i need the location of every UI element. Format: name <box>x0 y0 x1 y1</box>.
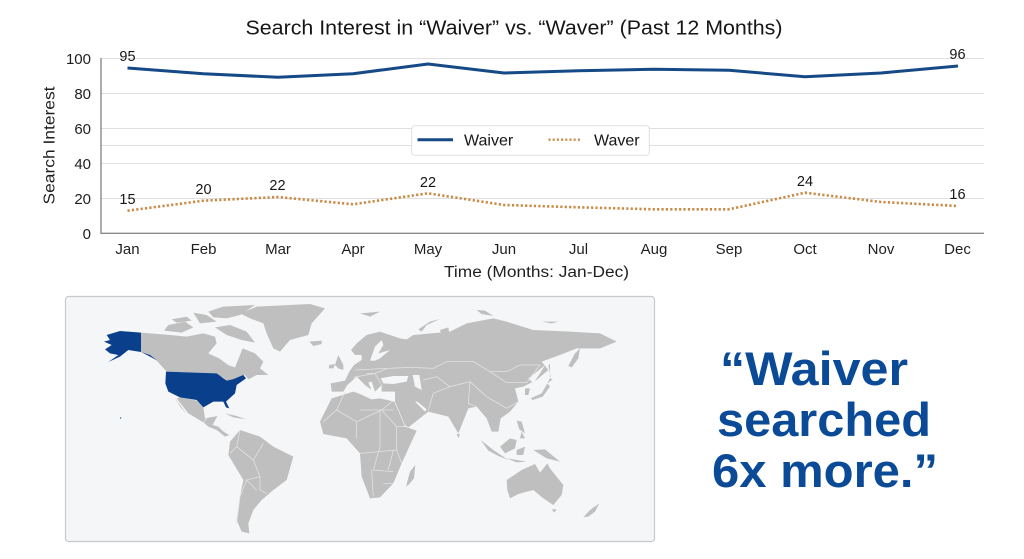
callout quote <box>712 342 938 497</box>
map: country borders <box>203 362 540 523</box>
y axis labels: 0 <box>83 226 91 243</box>
data labels <box>119 47 966 208</box>
data labels: 15 <box>119 192 136 208</box>
Waiver line <box>128 64 958 77</box>
data labels: 16 <box>949 187 966 203</box>
x axis labels: Jan <box>115 241 140 258</box>
y axis labels: 20 <box>74 191 91 208</box>
x axis labels: Mar <box>265 241 291 258</box>
data labels: 22 <box>420 175 436 191</box>
legend <box>412 126 649 155</box>
legend: Waver <box>594 132 640 149</box>
map: land masses <box>141 304 617 533</box>
x axis labels <box>115 241 971 258</box>
y axis labels: 100 <box>66 51 91 68</box>
map: highlighted United States and Alaska <box>104 331 246 419</box>
x axis title: Time (Months: Jan-Dec) <box>444 264 629 281</box>
data labels: 95 <box>119 49 136 65</box>
map: seas and lakes <box>208 337 545 412</box>
callout quote: searched <box>717 393 931 446</box>
x axis labels: Nov <box>868 241 895 258</box>
legend: Waiver <box>464 132 514 149</box>
title: Search Interest in “Waiver” vs. “Waver” (Past 12 Months) <box>246 18 782 40</box>
y axis labels: 80 <box>74 86 91 103</box>
data labels: 22 <box>269 178 286 194</box>
callout quote: “Waiver <box>720 342 908 395</box>
callout quote: 6x more.” <box>712 444 938 497</box>
y axis labels: 40 <box>74 156 91 173</box>
x axis labels: Aug <box>641 241 667 258</box>
x axis labels: Oct <box>793 241 817 258</box>
x axis labels: Feb <box>191 241 216 258</box>
line chart <box>42 47 984 281</box>
x axis labels: Dec <box>944 241 971 258</box>
x axis labels: Apr <box>341 241 365 258</box>
Waver line <box>128 193 958 211</box>
x axis labels: May <box>414 241 443 258</box>
data labels: 96 <box>949 47 966 63</box>
panel: world map <box>66 296 654 542</box>
data labels: 20 <box>195 182 212 198</box>
x axis labels: Jul <box>569 241 588 258</box>
data labels: 24 <box>797 174 813 190</box>
x axis labels: Jun <box>492 241 516 258</box>
x axis labels: Sep <box>716 241 742 258</box>
y axis labels <box>66 51 91 243</box>
y axis labels: 60 <box>74 121 91 138</box>
y axis title: Search Interest <box>42 86 58 204</box>
